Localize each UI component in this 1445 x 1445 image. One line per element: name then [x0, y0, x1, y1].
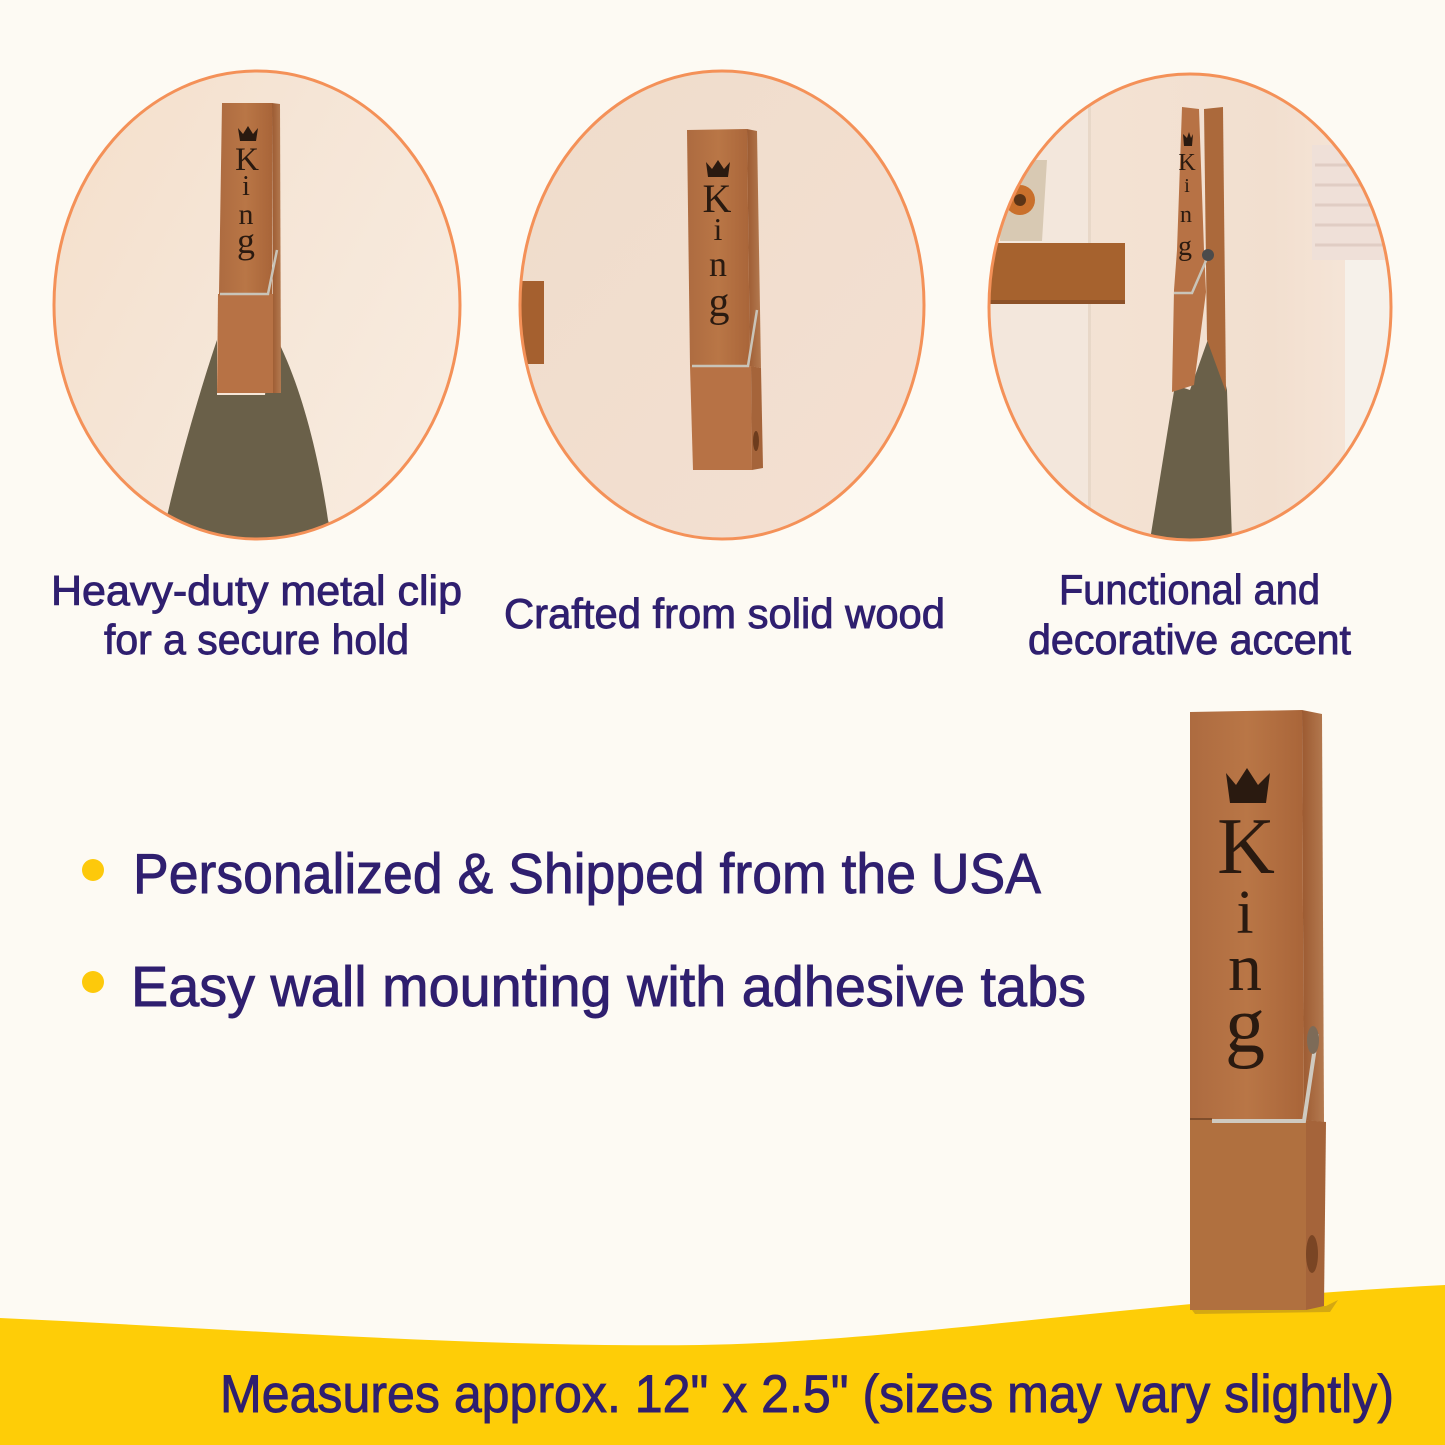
caption: heavy-duty metal clip: for a secure hold — [104, 616, 409, 663]
clip word King: n — [1180, 202, 1192, 228]
towel — [1150, 328, 1232, 540]
clip back part — [1204, 107, 1226, 392]
clip word King: g — [708, 280, 730, 326]
clip word King: i — [714, 211, 723, 247]
upper side — [1302, 710, 1324, 1122]
footer text: dimensions: Measures approx. 12" x 2.5" (sizes may vary slightly) — [220, 1365, 1394, 1424]
clip lower face — [690, 366, 752, 470]
clip word King: n — [709, 244, 727, 284]
clip word King: i — [242, 171, 250, 202]
crown — [238, 126, 258, 141]
clip word King: i — [1236, 879, 1254, 947]
bullet: personalized: Personalized & Shipped from the USA — [133, 842, 1041, 906]
caption: functional and decorative accent: Functional and — [1059, 566, 1320, 613]
large clip product image — [1190, 710, 1338, 1314]
clip spring — [1174, 256, 1208, 293]
icon: towel left — [168, 340, 329, 538]
clip spring — [220, 250, 277, 294]
clip word King — [1217, 803, 1275, 1070]
clip word King: K — [235, 142, 259, 178]
clip word King: K — [703, 176, 732, 221]
hole — [1306, 1235, 1318, 1273]
shadow — [1192, 1300, 1338, 1314]
clip word King: g — [1178, 231, 1192, 262]
clip word King: i — [1184, 175, 1190, 197]
upper face — [1190, 710, 1304, 1120]
clip word King: K — [1217, 803, 1275, 891]
clip word King: g — [1225, 982, 1265, 1070]
clip word King: n — [1228, 929, 1262, 1005]
shelf end — [520, 281, 544, 364]
vase — [1000, 160, 1047, 241]
hole — [753, 431, 759, 451]
clip side — [747, 129, 761, 368]
yellow footer wave — [0, 1285, 1445, 1445]
caption: heavy-duty metal clip — [51, 567, 462, 663]
panel: photo of clip on wall — [515, 68, 930, 543]
caption: functional and decorative accent — [1028, 566, 1351, 663]
caption: functional and decorative accent: decorative accent — [1028, 616, 1351, 663]
crown — [706, 160, 730, 177]
clip word King: g — [237, 221, 255, 261]
clip side — [272, 103, 281, 393]
clip word King — [235, 142, 259, 261]
clip word King — [704, 186, 731, 325]
panel: photo of clip beside shelf — [985, 70, 1395, 545]
clip word King — [1179, 132, 1196, 261]
clip spring — [692, 310, 757, 366]
lower side — [1306, 1120, 1326, 1310]
crown — [1226, 768, 1270, 803]
window — [1345, 260, 1390, 452]
clip lower face — [217, 294, 273, 393]
clip upper face — [687, 129, 750, 366]
caption: heavy-duty metal clip: Heavy-duty metal clip — [51, 567, 462, 614]
shelf — [985, 243, 1125, 303]
side wall — [1068, 108, 1088, 505]
caption: crafted from solid wood: Crafted from solid wood — [504, 590, 945, 637]
clip front part — [1172, 107, 1206, 392]
lower face — [1190, 1120, 1306, 1310]
spring — [1212, 1034, 1317, 1121]
panel: photo of clip holding towel — [50, 68, 465, 545]
clip upper face — [219, 103, 272, 294]
seam — [1190, 1118, 1212, 1120]
clip word King: n — [238, 198, 254, 231]
clip word King: K — [1178, 150, 1196, 176]
bullet: wall mounting: Easy wall mounting with adhesive tabs — [131, 955, 1086, 1019]
